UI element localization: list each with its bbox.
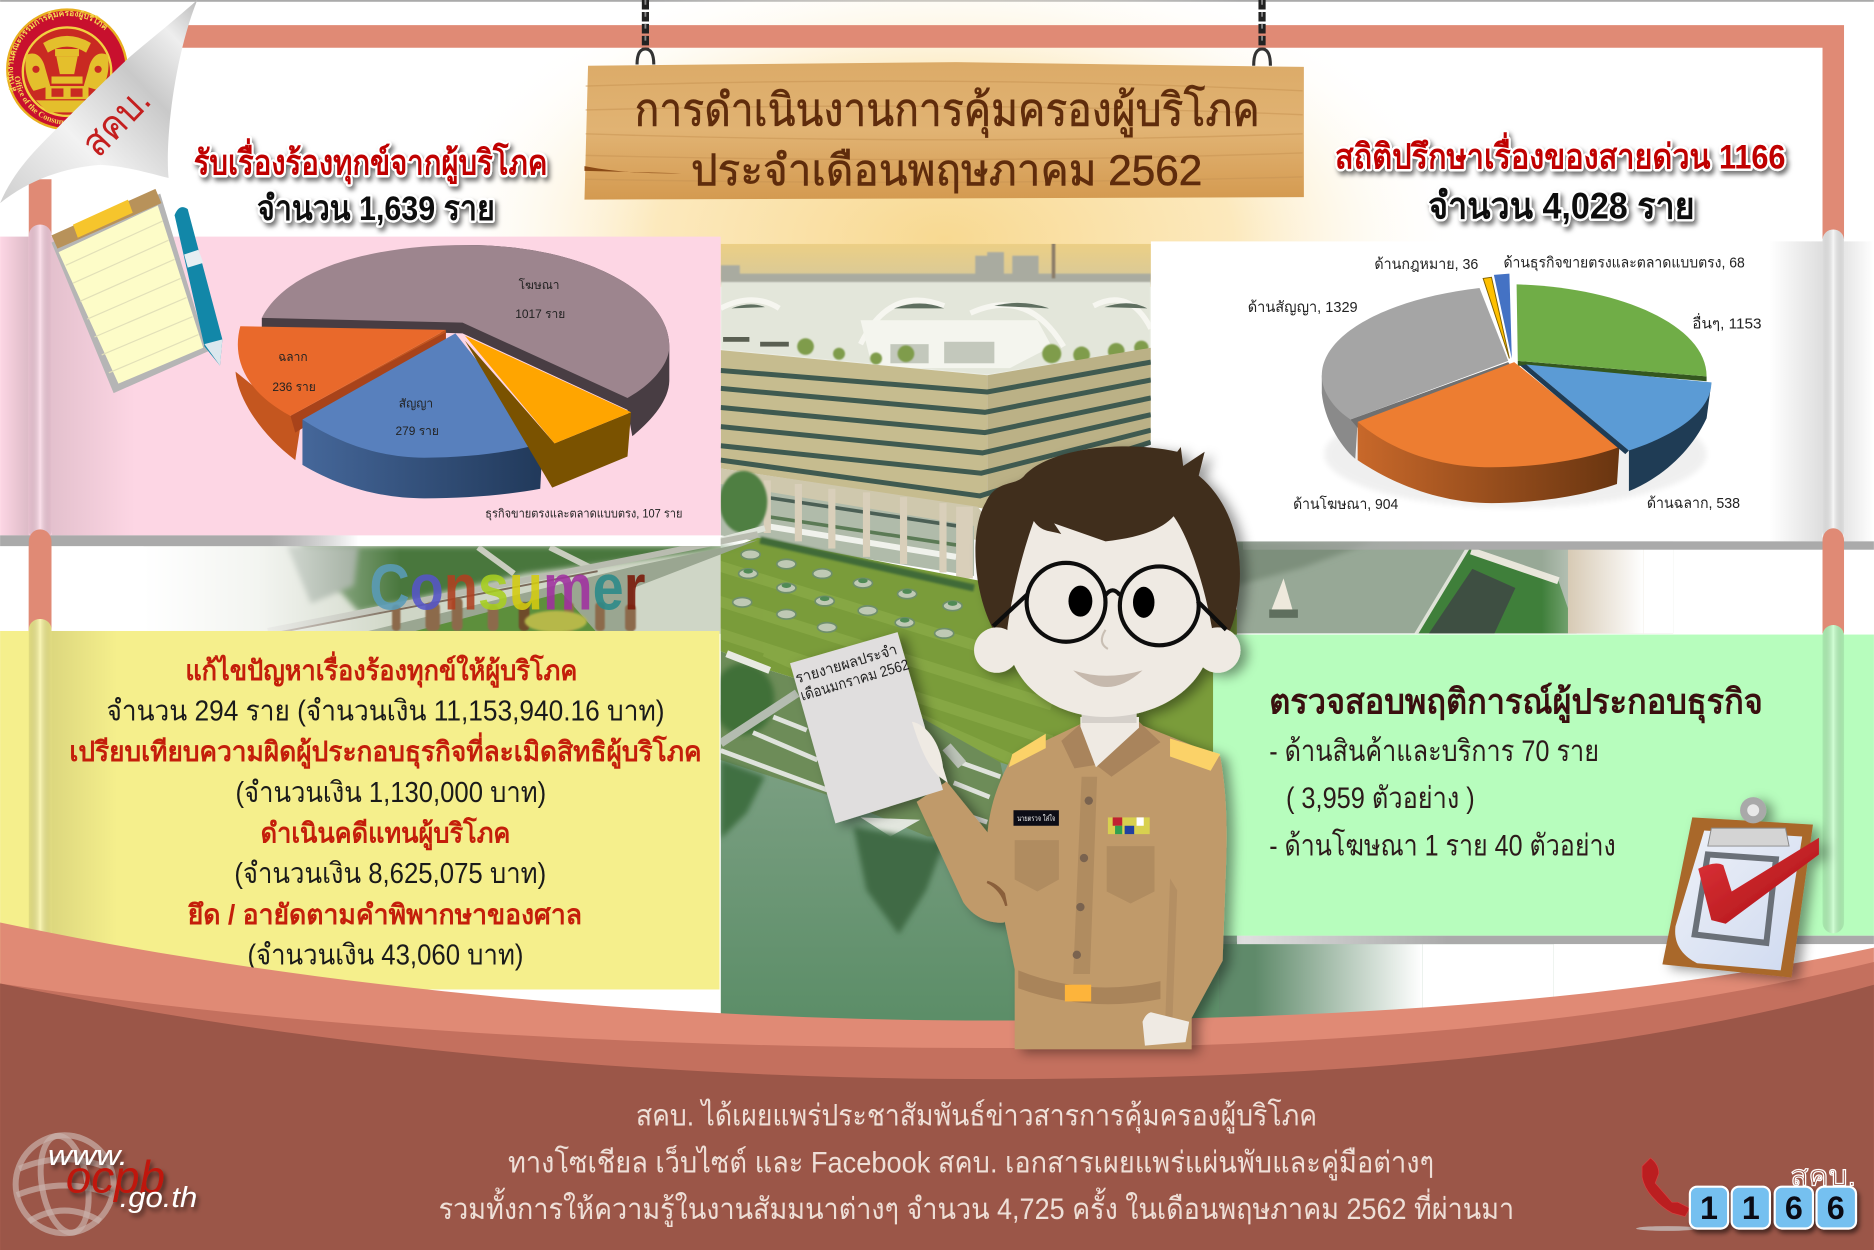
title: การดำเนินงานการคุ้มครองผู้บริโภค	[635, 84, 1260, 138]
website logo: www.	[48, 1140, 128, 1172]
footer text: รวมทั้งการให้ความรู้ในงานสัมมนาต่างๆ จำนวน 4,725 ครั้ง ในเดือนพฤษภาคม 2562 ที่ผ่านมา	[439, 1187, 1514, 1227]
slice: direct sales	[465, 336, 631, 488]
character: officer in uniform	[790, 446, 1241, 1049]
icon: clipboard with check mark	[1662, 797, 1819, 978]
ribbon bar	[1108, 817, 1150, 834]
report paper: เดือนมกราคม 2562	[799, 656, 911, 705]
background photo: government complex	[144, 243, 1679, 1076]
results text: เปรียบเทียบความผิดผู้ประกอบธุรกิจที่ละเมิดสิทธิผู้บริโภค	[69, 732, 702, 769]
pie labels: ฉลาก	[278, 350, 308, 364]
name tag: นายตรวจ ใส่ใจ	[1017, 814, 1055, 823]
building face left	[721, 350, 987, 509]
slice: direct sales	[1494, 274, 1512, 359]
frame: salmon top and right bar	[179, 25, 1844, 239]
hotline 1166 badge: 1	[1742, 1190, 1760, 1226]
slice: contract	[1322, 288, 1511, 459]
pie chart: complaints by type	[236, 245, 682, 520]
pie labels: ด้านโฆษณา, 904	[1293, 495, 1398, 513]
pie labels: อื่นๆ, 1153	[1692, 313, 1762, 333]
Consumer wordmark: Consumer	[369, 551, 645, 623]
inspection text	[1269, 682, 1763, 863]
heading: complaints received	[194, 137, 547, 228]
check mark	[1698, 838, 1819, 924]
footer text: สคบ. ได้เผยแพร่ประชาสัมพันธ์ข่าวสารการคุ้มครองผู้บริโภค	[636, 1099, 1317, 1134]
results text: (จำนวนเงิน 8,625,075 บาท)	[234, 858, 546, 890]
curl label: สคบ.	[73, 78, 159, 165]
inspection text: ตรวจสอบพฤติการณ์ผู้ประกอบธุรกิจ	[1269, 682, 1763, 723]
raised arm	[917, 782, 1018, 923]
results text	[69, 651, 702, 971]
pond base	[720, 705, 1237, 1020]
frame: salmon left bar	[29, 179, 51, 944]
lawn	[720, 538, 1237, 765]
lawn planters	[732, 548, 963, 639]
report paper	[790, 632, 943, 823]
official seal: สำนักงานคณะกรรมการคุ้มครองผู้บริโภค	[6, 10, 107, 92]
pie labels: 279 ราย	[395, 424, 439, 438]
hotline 1166 badge: 1	[1700, 1190, 1718, 1226]
stairs and wall wedge	[721, 651, 1016, 837]
pen	[175, 207, 222, 366]
neck shadow	[1082, 713, 1137, 723]
sailboat	[1269, 578, 1298, 618]
hotline 1166 badge: สคบ.	[1790, 1160, 1856, 1192]
page curl corner	[0, 0, 197, 203]
title	[635, 84, 1260, 195]
face	[1007, 516, 1212, 717]
placket and buttons	[1073, 777, 1097, 974]
arm crease	[987, 882, 1006, 906]
pie labels: ด้านธุรกิจขายตรงและตลาดแบบตรง, 68	[1503, 255, 1745, 272]
wooden title sign	[584, 62, 1304, 200]
panel: white hotline panel	[1151, 229, 1874, 633]
right band	[1237, 542, 1618, 634]
hotline 1166 badge: 6	[1827, 1190, 1845, 1226]
pie chart: complaints by type: ธุรกิจขายตรงและตลาดแบบตรง, 107 ราย	[485, 506, 682, 520]
results text: ดำเนินคดีแทนผู้บริโภค	[261, 815, 510, 850]
pie labels	[1248, 255, 1762, 513]
footer text	[439, 1099, 1514, 1227]
icon: globe	[16, 1132, 114, 1236]
inspection text: - ด้านโฆษณา 1 ราย 40 ตัวอย่าง	[1269, 829, 1616, 863]
pockets	[1015, 840, 1059, 891]
slice: advertising	[262, 245, 669, 436]
results text: (จำนวนเงิน 1,130,000 บาท)	[236, 777, 546, 809]
slice: contract	[302, 333, 543, 498]
right lower band	[1234, 942, 1554, 1017]
hair back	[975, 446, 1240, 636]
pie labels: สัญญา	[399, 397, 433, 411]
panel: pink complaints panel	[0, 225, 721, 633]
results text: ยึด / อายัดตามคำพิพากษาของศาล	[188, 899, 582, 930]
footer curved band	[0, 923, 1874, 1250]
eyes	[1068, 586, 1092, 617]
uniform body	[987, 724, 1227, 1049]
pie labels	[272, 278, 565, 438]
official seal: Office of the Consumer	[14, 76, 64, 124]
slice: labelling	[1526, 364, 1711, 491]
heading: hotline statistics: จำนวน 4,028 ราย	[1428, 185, 1695, 227]
icon: telephone handset	[1642, 1158, 1690, 1217]
icon: notepad with pen	[51, 189, 222, 393]
panel: yellow results panel	[0, 619, 720, 989]
pie labels: โฆษณา	[519, 278, 560, 292]
tree reflections	[853, 827, 944, 935]
title: ประจำเดือนพฤษภาคม 2562	[691, 147, 1202, 195]
hotline 1166 badge: 6	[1785, 1190, 1803, 1226]
panel: green inspection panel	[1213, 625, 1874, 944]
epaulettes	[1009, 734, 1046, 767]
report paper: รายงายผลประจำ	[793, 641, 899, 687]
website logo	[16, 1132, 197, 1236]
official seal	[6, 8, 128, 130]
results text: (จำนวนเงิน 43,060 บาท)	[247, 939, 524, 971]
results text: จำนวน 294 ราย (จำนวนเงิน 11,153,940.16 บาท)	[106, 696, 665, 728]
heading: hotline statistics: สถิติปรึกษาเรื่องของสายด่วน 1166	[1335, 131, 1785, 176]
icon: hanging chains	[637, 0, 1270, 66]
slice: labelling	[236, 326, 446, 460]
hotline 1166 badge	[1636, 1158, 1856, 1231]
left band: pond, trees and road	[144, 534, 758, 635]
glasses	[993, 563, 1226, 645]
mouth	[1073, 670, 1143, 687]
ears	[974, 627, 1019, 673]
sleeve fold	[1165, 878, 1177, 1022]
footer text: ทางโซเชียล เว็บไซต์ และ Facebook สคบ. เอกสารเผยแพร่แผ่นพับและคู่มือต่างๆ	[508, 1143, 1434, 1180]
building face right	[987, 348, 1151, 511]
skyline	[721, 243, 1151, 284]
pie labels: 1017 ราย	[515, 307, 565, 321]
belt	[1018, 970, 1160, 1004]
pie labels: ด้านสัญญา, 1329	[1248, 299, 1358, 316]
inspection text: - ด้านสินค้าและบริการ 70 ราย	[1269, 735, 1599, 768]
ground floor columns	[721, 484, 974, 576]
slice: law	[1483, 277, 1509, 359]
results text: แก้ไขปัญหาเรื่องร้องทุกข์ให้ผู้บริโภค	[185, 651, 577, 688]
glove lower	[1143, 1012, 1189, 1046]
nose	[1102, 630, 1108, 649]
website logo: ocpb	[66, 1152, 165, 1203]
inspection text: ( 3,959 ตัวอย่าง )	[1286, 782, 1475, 815]
heading: complaints received: จำนวน 1,639 ราย	[257, 190, 495, 228]
pie labels: 236 ราย	[272, 380, 316, 394]
heading: hotline statistics	[1335, 131, 1785, 227]
pie labels: ด้านกฎหมาย, 36	[1374, 256, 1478, 273]
website logo: .go.th	[120, 1182, 197, 1214]
pie chart: hotline by type	[1248, 255, 1762, 513]
name tag	[1013, 810, 1059, 826]
collar	[1061, 722, 1160, 777]
slice: other	[1517, 284, 1707, 381]
heading: complaints received: รับเรื่องร้องทุกข์จากผู้บริโภค	[194, 137, 547, 184]
clip	[1708, 797, 1789, 846]
glove hand	[912, 722, 948, 783]
slice: advertising	[1358, 362, 1629, 503]
pie labels: ด้านฉลาก, 538	[1647, 495, 1740, 512]
roof	[721, 282, 1151, 375]
